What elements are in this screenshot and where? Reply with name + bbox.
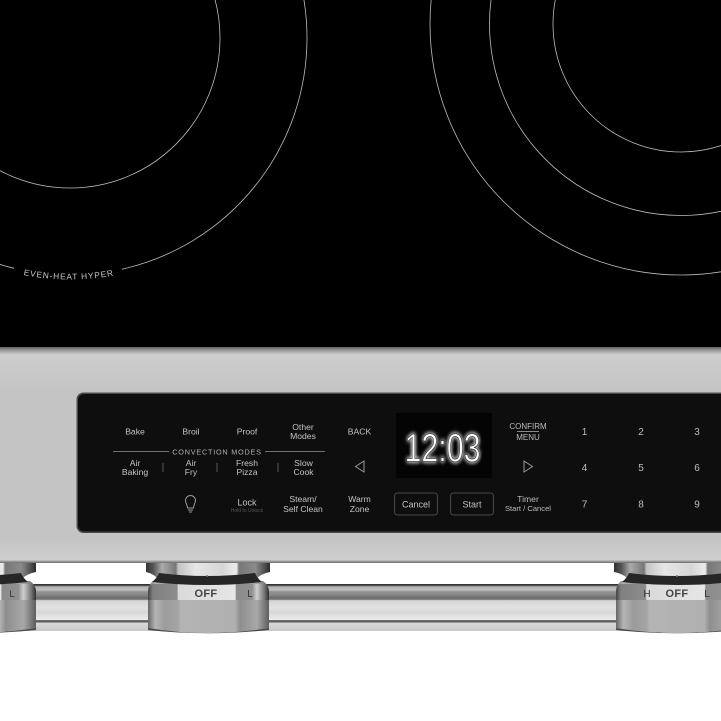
center knob: OFF [195, 588, 217, 600]
convection modes heading [113, 447, 325, 472]
start button [450, 493, 494, 515]
icon: light bulb [186, 496, 196, 512]
number keypad: 7 [582, 500, 588, 510]
start button: Start [462, 500, 482, 510]
number keypad: 4 [582, 463, 588, 474]
right knob: OFF [666, 588, 688, 600]
number keypad: 3 [694, 427, 700, 438]
cancel button: Cancel [402, 500, 430, 510]
icon: right arrow [524, 461, 532, 472]
number keypad: 1 [582, 427, 588, 438]
left burner rings [0, 0, 307, 269]
cancel button [394, 493, 438, 515]
left knob [0, 563, 36, 633]
number keypad [582, 427, 700, 510]
mode button labels: BACK [348, 426, 371, 436]
mode button labels: Cook [293, 467, 314, 477]
mode button labels: Zone [350, 504, 370, 514]
mode button labels: Baking [122, 467, 148, 477]
icon: left arrow [356, 461, 364, 472]
convection modes heading: CONVECTION MODES [172, 447, 262, 456]
number keypad: 8 [638, 500, 644, 510]
burner label: even-heat hyper [24, 270, 113, 280]
mode button labels: Slow [294, 458, 314, 468]
number keypad: 9 [694, 500, 700, 510]
mode button labels: Pizza [236, 467, 258, 477]
timer label: Timer [517, 494, 539, 504]
burner label: even-heat hyper: EVEN-HEAT HYPER [24, 270, 113, 280]
mode button labels: Air [186, 458, 196, 468]
mode button labels: Broil [182, 426, 200, 436]
right knob [614, 563, 721, 633]
right knob: L [704, 589, 710, 600]
confirm menu label [509, 422, 547, 442]
timer label [505, 494, 551, 513]
number keypad: 2 [638, 427, 644, 438]
stainless control fascia [0, 347, 721, 563]
center knob: L [247, 589, 253, 600]
mode button labels: Steam/ [289, 494, 317, 504]
confirm menu label: MENU [516, 433, 540, 442]
mode button labels: Self Clean [283, 504, 323, 514]
oven rail [0, 584, 721, 631]
mode button labels: Fresh [236, 458, 258, 468]
number keypad: 6 [694, 463, 700, 474]
mode button labels: Warm [348, 494, 371, 504]
mode button labels: Fry [185, 467, 198, 477]
left knob: L [9, 589, 15, 600]
number keypad: 5 [638, 463, 644, 474]
confirm menu label: CONFIRM [509, 422, 547, 431]
right burner rings [430, 0, 721, 275]
mode button labels [122, 422, 371, 514]
mode button labels: Lock [237, 498, 257, 508]
digital clock display [396, 413, 492, 478]
mode button labels: Other [292, 422, 314, 432]
mode button labels: Bake [125, 426, 145, 436]
right knob: H [643, 589, 651, 600]
mode button labels: Proof [237, 426, 258, 436]
mode button labels: Modes [290, 431, 316, 441]
black touch control panel [76, 392, 721, 533]
cooktop glass surface [0, 0, 721, 347]
center knob [146, 563, 270, 633]
hold to unlock note: Hold to Unlock [231, 508, 264, 514]
mode button labels: Air [130, 458, 140, 468]
timer label: Start / Cancel [505, 504, 551, 513]
digital clock display: 12:03 [404, 425, 481, 471]
